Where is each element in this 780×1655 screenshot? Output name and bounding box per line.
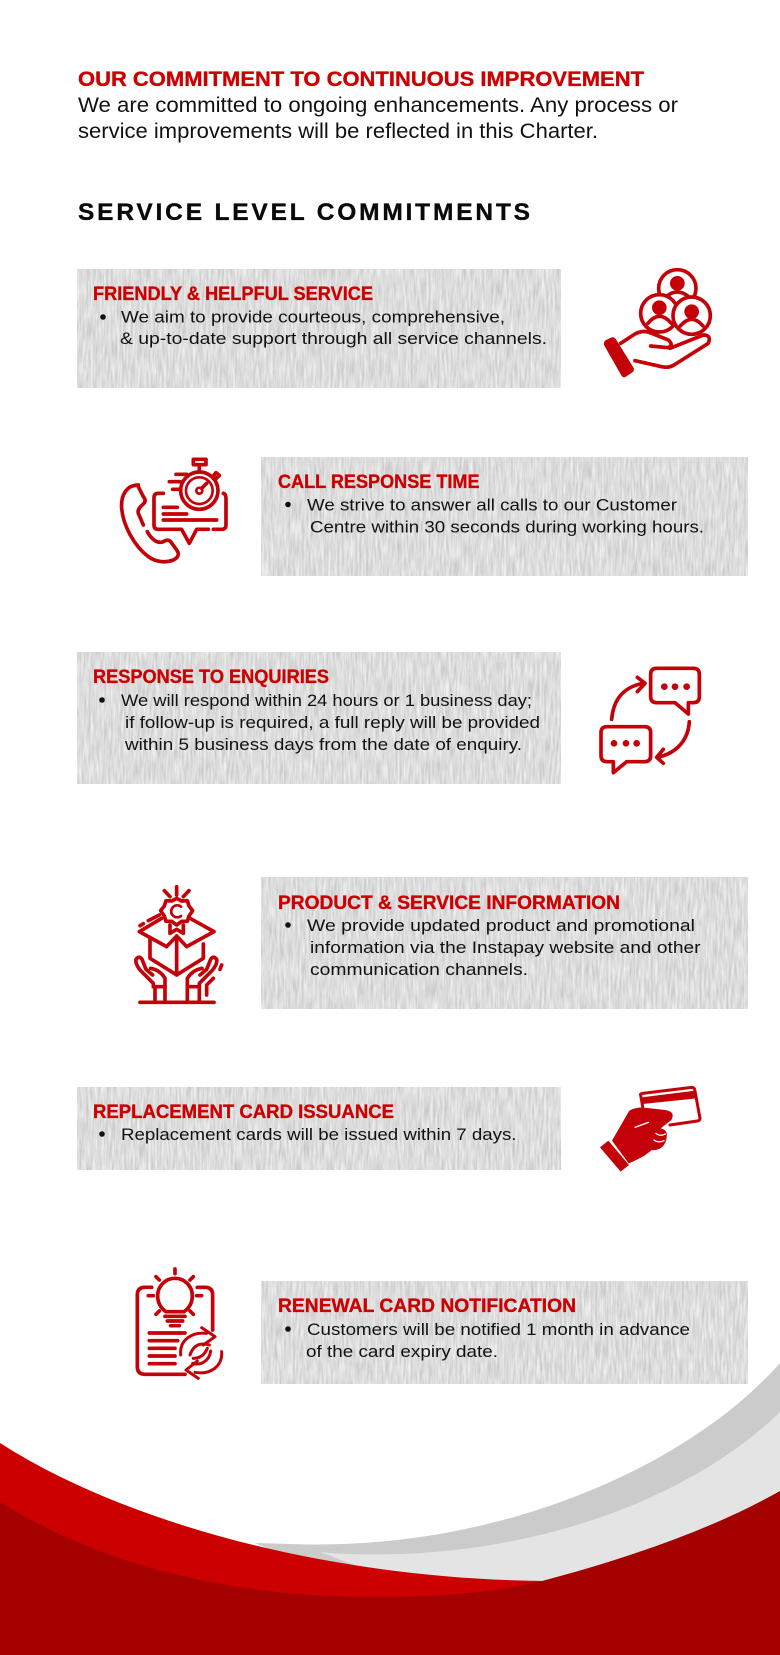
panel heading: PRODUCT & SERVICE INFORMATION <box>278 893 620 914</box>
bullet <box>285 1326 291 1332</box>
intro text line 2: service improvements will be reflected in this Charter. <box>78 120 598 143</box>
bullet <box>99 697 105 703</box>
body line 1: Customers will be notified 1 month in advance <box>307 1320 690 1339</box>
panel: response to enquiries <box>77 652 561 784</box>
section: continuous improvement <box>78 67 678 143</box>
body line 2: & up-to-date support through all service channels. <box>120 329 547 348</box>
panel heading: RESPONSE TO ENQUIRIES <box>93 667 329 688</box>
icon: hand holding card <box>600 1087 700 1172</box>
body line 1: Replacement cards will be issued within 7 days. <box>121 1125 516 1144</box>
body line 2: if follow-up is required, a full reply will be provided <box>125 713 540 732</box>
footer waves <box>0 1363 780 1655</box>
icon: hand holding people <box>604 270 710 377</box>
wave: light grey <box>320 1412 780 1600</box>
body line 1: We provide updated product and promotional <box>307 916 695 935</box>
body line 3: communication channels. <box>310 960 528 979</box>
bullet <box>285 922 291 928</box>
heading: our commitment: OUR COMMITMENT TO CONTINUOUS IMPROVEMENT <box>78 67 644 91</box>
wave: dark red <box>0 1491 780 1655</box>
body line 1: We will respond within 24 hours or 1 business day; <box>121 691 532 710</box>
body line 1: We aim to provide courteous, comprehensive, <box>121 308 505 326</box>
panel heading: RENEWAL CARD NOTIFICATION <box>278 1296 576 1317</box>
wave: mid grey <box>255 1363 780 1600</box>
bullet <box>99 1131 105 1137</box>
icon: open box with hands <box>136 887 222 1002</box>
panel: replacement card issuance <box>77 1087 561 1170</box>
panel: renewal card notification <box>261 1281 748 1384</box>
wave: red <box>0 1443 542 1620</box>
panel heading: REPLACEMENT CARD ISSUANCE <box>93 1102 394 1123</box>
panel heading: FRIENDLY & HELPFUL SERVICE <box>93 284 373 305</box>
panel: friendly and helpful service <box>77 269 561 388</box>
body line 2: of the card expiry date. <box>306 1342 498 1361</box>
intro text: We are committed to ongoing enhancements. Any process or <box>78 94 678 117</box>
icon: idea checklist with refresh <box>137 1269 222 1378</box>
body line 3: within 5 business days from the date of enquiry. <box>124 735 522 754</box>
body line 2: information via the Instapay website and other <box>310 938 701 957</box>
bullet <box>285 502 291 507</box>
icon: chat exchange <box>601 668 699 773</box>
panel: product and service information <box>261 877 748 1009</box>
panel heading: CALL RESPONSE TIME <box>278 472 480 493</box>
body line 2: Centre within 30 seconds during working hours. <box>310 518 704 536</box>
heading: service level commitments: SERVICE LEVEL COMMITMENTS <box>78 199 530 226</box>
panel: call response time <box>261 457 748 576</box>
icon: phone with stopwatch <box>122 459 226 562</box>
bullet <box>100 314 106 320</box>
body line 1: We strive to answer all calls to our Customer <box>307 496 677 514</box>
